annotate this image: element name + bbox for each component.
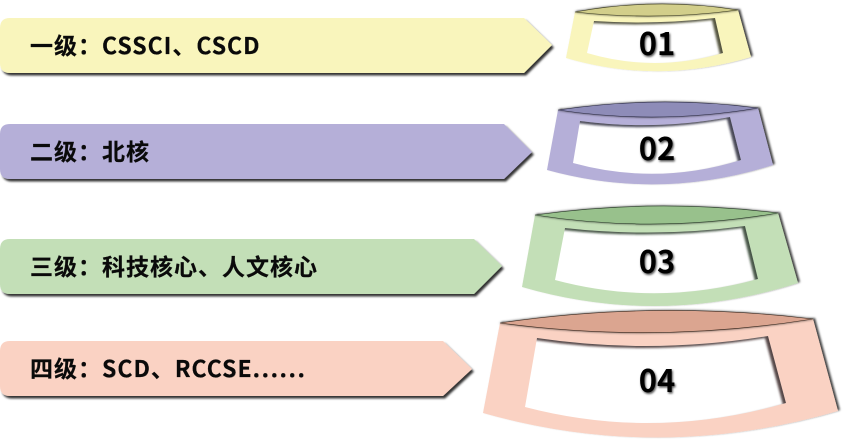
tier 1 arrow label — [0, 18, 552, 73]
lens 03 — [535, 206, 778, 224]
cup 02 — [547, 100, 776, 185]
tier 1 arrow label: 一级：CSSCI、CSCD — [30, 27, 261, 61]
number 01: 01 — [639, 19, 675, 64]
lens 01 — [575, 4, 738, 16]
number 03: 03 — [639, 237, 675, 282]
tier 4 arrow label: 四级：SCD、RCCSE...... — [30, 350, 306, 384]
tier 3 arrow label — [0, 239, 502, 294]
lens 02 — [558, 102, 758, 117]
lens 04 — [500, 310, 813, 333]
tier 3 arrow label: 三级：科技核心、人文核心 — [30, 248, 318, 282]
tier 2 arrow label — [0, 124, 532, 179]
tier 4 arrow label — [0, 341, 472, 396]
cup 04 — [467, 302, 843, 439]
cup 01 — [566, 2, 754, 72]
cup 03 — [522, 204, 802, 307]
number 04: 04 — [639, 356, 675, 401]
tier 2 arrow label: 二级：北核 — [30, 133, 150, 167]
number 02: 02 — [639, 124, 675, 169]
